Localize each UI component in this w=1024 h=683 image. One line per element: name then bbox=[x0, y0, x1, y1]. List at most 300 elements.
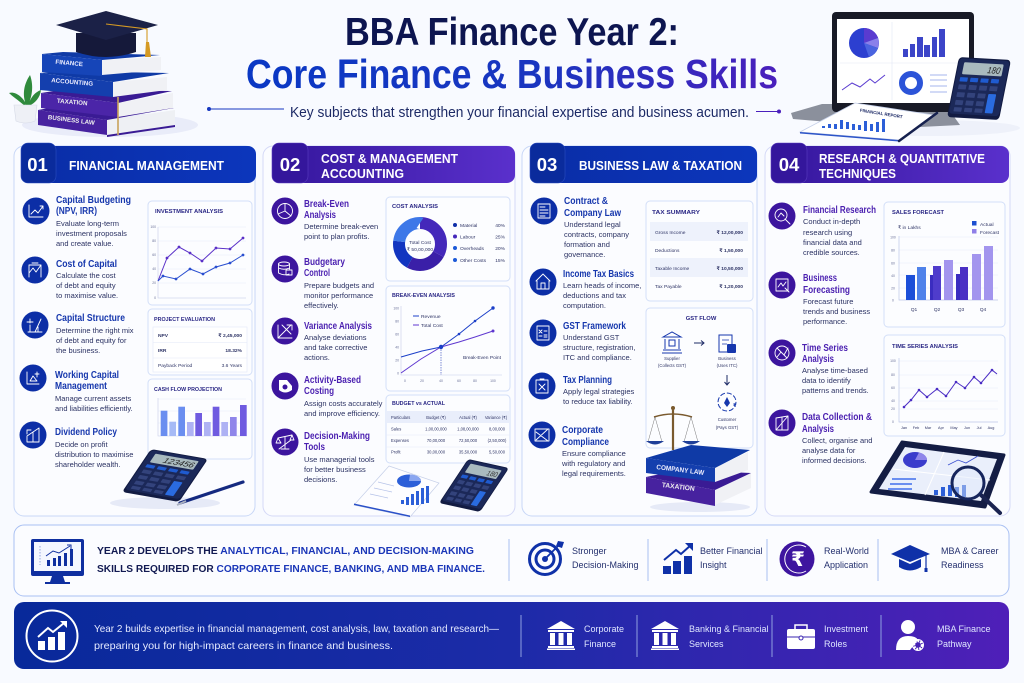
card: Budget vs Actual table: 1,08,00,000 bbox=[457, 426, 480, 432]
card: Tax Summary table: ₹ 10,50,000 bbox=[716, 266, 743, 272]
section header bbox=[530, 143, 757, 183]
card: GST Flow diagram: (Collects GST) bbox=[658, 363, 687, 368]
item: Contract & Company Law: contracts, company bbox=[564, 230, 629, 239]
section header: RESEARCH & QUANTITATIVE bbox=[819, 152, 985, 166]
career: Investment Roles: Roles bbox=[824, 639, 848, 649]
item: Budgetary Control: Control bbox=[304, 268, 330, 279]
item: GST Framework: structure, registration, bbox=[563, 343, 636, 352]
item: Cost of Capital bbox=[22, 256, 118, 300]
card: Budget vs Actual table: 1,00,00,000 bbox=[425, 426, 448, 432]
item: Time Series Analysis: Analyse time-based bbox=[802, 366, 868, 375]
icon: magnifier bbox=[952, 467, 1000, 513]
card: Break-Even Analysis line chart: 100 bbox=[393, 306, 399, 310]
item: Budgetary Control: Prepare budgets and bbox=[304, 281, 374, 290]
item: Dividend Policy: Dividend Policy bbox=[55, 427, 117, 438]
icon: growth chart in circle bbox=[26, 610, 78, 662]
card: Cost Analysis donut chart: 15% bbox=[495, 258, 506, 264]
item: GST Framework: GST Framework bbox=[563, 321, 626, 332]
item: Contract & Company Law: Understand legal bbox=[564, 220, 621, 229]
card: Sales Forecast bar chart: 40 bbox=[891, 274, 895, 278]
card: Break-Even Analysis line chart: 0 bbox=[397, 372, 399, 376]
item: Tax Planning: to reduce tax liability. bbox=[563, 397, 632, 406]
card: Break-Even Analysis line chart: 20 bbox=[420, 379, 424, 383]
card: Cost Analysis donut chart: Overheads bbox=[460, 246, 484, 252]
title: Core Finance & Business Skills bbox=[246, 51, 778, 97]
card: Break-Even Analysis line chart: 60 bbox=[395, 332, 399, 336]
card: Cost Analysis donut chart: Other Costs bbox=[460, 258, 487, 264]
item: Variance Analysis: and take corrective bbox=[304, 343, 367, 352]
icon: calculator and pen bbox=[110, 449, 243, 509]
item: Capital Budgeting: (NPV, IRR) bbox=[56, 206, 97, 217]
item: Data Collection & Analysis: Collect, organise and bbox=[802, 436, 872, 445]
item: Decision-Making Tools: for better business bbox=[304, 465, 366, 474]
item: Business Forecasting: trends and business bbox=[803, 307, 870, 316]
card: Cost Analysis donut chart: 20% bbox=[495, 246, 506, 252]
card: Budget vs Actual table bbox=[386, 395, 510, 463]
item: Activity-Based Costing: Assign costs accurately bbox=[304, 399, 383, 408]
item: Tax Planning: Tax Planning bbox=[563, 375, 612, 386]
item: Corporate Compliance bbox=[528, 422, 626, 478]
card: Break-Even Analysis line chart: Break-Even Point bbox=[463, 355, 502, 361]
card: GST Flow diagram: Supplier bbox=[664, 356, 680, 361]
career: Investment Roles: Investment bbox=[824, 624, 869, 634]
card: Project Evaluation table: PROJECT EVALUATION bbox=[154, 317, 215, 323]
item: Cost of Capital: Cost of Capital bbox=[56, 259, 117, 270]
item: Activity-Based Costing bbox=[272, 372, 383, 418]
section header: COST & MANAGEMENT bbox=[321, 152, 458, 166]
item: Corporate Compliance: Ensure compliance bbox=[562, 449, 626, 458]
benefit: Stronger Decision-Making: Decision-Making bbox=[572, 560, 639, 570]
card: Sales Forecast bar chart: Actual bbox=[980, 222, 994, 228]
item: Variance Analysis bbox=[272, 318, 372, 362]
item: Financial Research: credible sources. bbox=[803, 248, 860, 257]
illustration: law books: COMPANY LAW bbox=[656, 464, 705, 477]
item: Working Capital Management: and liabilities efficiently. bbox=[55, 404, 133, 413]
card: Sales Forecast bar chart: 60 bbox=[891, 262, 895, 266]
icon: pen bbox=[899, 113, 937, 141]
item: Income Tax Basics: computation. bbox=[563, 301, 606, 310]
card: Investment Analysis line chart: 0 bbox=[154, 296, 156, 300]
benefit: Better Financial Insight bbox=[663, 543, 763, 574]
card: Tax Summary table: Gross Income bbox=[655, 230, 686, 236]
card: Cost Analysis donut chart: COST ANALYSIS bbox=[392, 204, 438, 210]
panel: 02 Cost & Management Accounting bbox=[263, 143, 515, 517]
benefit: Better Financial Insight: Better Financial bbox=[700, 546, 763, 556]
card: Time Series Analysis line chart: 40 bbox=[891, 399, 895, 403]
item: Time Series Analysis bbox=[768, 340, 869, 395]
item: Capital Structure: Determine the right mix bbox=[56, 326, 134, 335]
section header: 04 bbox=[779, 154, 800, 175]
item: Business Forecasting bbox=[768, 272, 870, 326]
icon: supplier bank bbox=[662, 332, 682, 353]
card: Cost Analysis donut chart: Material bbox=[460, 223, 477, 229]
card: Budget vs Actual table: 70,00,000 bbox=[427, 438, 446, 443]
item: Income Tax Basics: Income Tax Basics bbox=[563, 269, 634, 280]
item: Business Forecasting: Forecasting bbox=[803, 285, 850, 296]
card: Break-Even Analysis line chart: 0 bbox=[404, 379, 406, 383]
item: Working Capital Management bbox=[20, 364, 133, 413]
icon: report with chart bbox=[354, 466, 439, 517]
book: Taxation bbox=[41, 90, 173, 117]
item: Decision-Making Tools: decisions. bbox=[304, 475, 337, 484]
item: Tax Planning: Apply legal strategies bbox=[563, 387, 635, 396]
card: Cost Analysis donut chart: 25% bbox=[495, 234, 506, 240]
card: Time Series Analysis line chart: Feb bbox=[913, 426, 919, 430]
icon: bookmark ribbon bbox=[117, 97, 119, 135]
card: Project Evaluation table: IRR bbox=[158, 348, 167, 354]
book: Business Law: BUSINESS LAW bbox=[47, 114, 95, 127]
benefit: MBA & Career Readiness: Readiness bbox=[941, 560, 984, 570]
card: Sales Forecast bar chart: Q2 bbox=[934, 307, 941, 313]
section header bbox=[771, 143, 1009, 183]
item: Activity-Based Costing: Activity-Based bbox=[304, 375, 361, 386]
book: Business Law bbox=[38, 106, 175, 137]
item: Tax Planning bbox=[528, 372, 635, 406]
card: Break-Even Analysis line chart: BREAK-EVEN ANALYSIS bbox=[392, 293, 455, 299]
icon: report sheet: FINANCIAL REPORT bbox=[860, 108, 903, 119]
item: Activity-Based Costing: and improve efficiency. bbox=[304, 409, 380, 418]
card: Sales Forecast bar chart: 20 bbox=[891, 286, 895, 290]
item: Time Series Analysis: data to identify bbox=[802, 376, 851, 385]
item: Break-Even Analysis: point to plan profits. bbox=[304, 232, 369, 241]
card: Investment Analysis line chart: 80 bbox=[152, 239, 156, 243]
card: Break-Even Analysis line chart: 40 bbox=[439, 379, 443, 383]
card: Tax Summary table: Deductions bbox=[655, 248, 680, 254]
book: Taxation: TAXATION bbox=[57, 98, 88, 107]
card: Budget vs Actual table: 8,00,000 bbox=[489, 426, 506, 432]
closing text: Year 2 builds expertise in financial management, cost analysis, law, taxation and research— bbox=[94, 623, 499, 635]
item: Contract & Company Law: Contract & bbox=[564, 196, 608, 207]
card: Time Series Analysis line chart bbox=[884, 335, 1005, 436]
item: Capital Structure bbox=[22, 312, 134, 355]
section header: 03 bbox=[537, 154, 557, 175]
item: Capital Budgeting: Evaluate long-term bbox=[56, 219, 119, 228]
card: Cost Analysis donut chart bbox=[386, 197, 510, 281]
card: Budget vs Actual table: Budget (₹) bbox=[426, 415, 446, 420]
card: Time Series Analysis line chart: Apr bbox=[938, 426, 945, 430]
card: Break-Even Analysis line chart bbox=[386, 286, 510, 391]
item: Budgetary Control: Budgetary bbox=[304, 257, 345, 268]
card: Break-Even Analysis line chart: Revenue bbox=[421, 314, 441, 320]
section header: TECHNIQUES bbox=[819, 167, 896, 181]
icon: calculator: 180 bbox=[986, 65, 1002, 76]
card: Sales Forecast bar chart: ₹ in Lakhs bbox=[898, 225, 921, 231]
illustration: law books bbox=[646, 445, 751, 512]
item: Dividend Policy: Decide on profit bbox=[55, 440, 108, 449]
illustration: tablet with magnifier bbox=[871, 442, 1004, 513]
career: Investment Roles bbox=[787, 624, 869, 649]
book: Accounting bbox=[40, 71, 169, 97]
card: Cash Flow Projection bar chart: CASH FLOW PROJECTION bbox=[154, 387, 222, 393]
career: Banking & Financial Services: Services bbox=[689, 639, 724, 649]
card: Tax Summary table: Tax Payable bbox=[655, 284, 682, 290]
item: Financial Research: Conduct in-depth bbox=[803, 217, 860, 226]
card: Break-Even Analysis line chart: 80 bbox=[395, 320, 399, 324]
card: Time Series Analysis line chart: 20 bbox=[891, 407, 895, 411]
card: Sales Forecast bar chart: Forecast bbox=[980, 230, 1000, 236]
card: Sales Forecast bar chart: 0 bbox=[892, 298, 894, 302]
item: Data Collection & Analysis: informed decisions. bbox=[802, 456, 867, 465]
illustration: scales of justice bbox=[646, 406, 700, 457]
illustration: laptop, calculator and report bbox=[791, 12, 1020, 142]
icon: monitor with chart bbox=[31, 539, 84, 584]
section header: 01 bbox=[27, 154, 48, 175]
card: Break-Even Analysis line chart: 100 bbox=[490, 379, 496, 383]
card: Tax Summary table: ₹ 12,00,000 bbox=[716, 230, 743, 236]
item: Cost of Capital: to maximise value. bbox=[56, 291, 118, 300]
card: Budget vs Actual table: Particulars bbox=[391, 415, 410, 420]
item: Capital Budgeting: and create value. bbox=[56, 239, 114, 248]
benefit: Real-World Application bbox=[780, 542, 869, 576]
card: Sales Forecast bar chart bbox=[884, 202, 1005, 327]
item: Income Tax Basics: Learn heads of income, bbox=[563, 281, 641, 290]
item: Decision-Making Tools: Decision-Making bbox=[304, 431, 370, 442]
icon: calculator and pen: 123456 bbox=[161, 456, 197, 469]
item: Financial Research bbox=[768, 202, 876, 257]
card: Sales Forecast bar chart: Q3 bbox=[958, 307, 965, 313]
title bbox=[246, 11, 778, 97]
card: Investment Analysis line chart bbox=[148, 201, 252, 305]
icon: calculator bbox=[947, 57, 1011, 120]
card: Tax Summary table bbox=[646, 201, 753, 301]
card: Budget vs Actual table: 72,50,000 bbox=[459, 438, 478, 443]
card: Investment Analysis line chart: 20 bbox=[152, 281, 156, 285]
item: Corporate Compliance: legal requirements. bbox=[562, 469, 626, 478]
card: Time Series Analysis line chart: May bbox=[950, 426, 958, 430]
card: Break-Even Analysis line chart: 40 bbox=[395, 346, 399, 350]
item: Dividend Policy: distribution to maximise bbox=[55, 450, 133, 459]
card: Time Series Analysis line chart: 100 bbox=[890, 359, 896, 363]
item: Data Collection & Analysis bbox=[768, 410, 872, 465]
section header: BUSINESS LAW & TAXATION bbox=[579, 159, 742, 173]
card: Investment Analysis line chart: INVESTMENT ANALYSIS bbox=[155, 209, 223, 215]
card: Tax Summary table: TAX SUMMARY bbox=[652, 210, 700, 216]
item: Budgetary Control: monitor performance bbox=[304, 291, 373, 300]
book: Accounting: ACCOUNTING bbox=[51, 77, 94, 88]
card: Cost Analysis donut chart: Total Cost bbox=[409, 240, 432, 246]
card: Project Evaluation table: 3.6 Years bbox=[222, 363, 243, 369]
panel: 01 Financial Management bbox=[14, 143, 256, 516]
item: Income Tax Basics bbox=[530, 268, 641, 310]
item: Financial Research: research using bbox=[803, 228, 852, 237]
card: Investment Analysis line chart: 60 bbox=[152, 253, 156, 257]
item: Contract & Company Law: formation and bbox=[564, 240, 610, 249]
card: Time Series Analysis line chart: TIME SERIES ANALYSIS bbox=[892, 344, 958, 350]
item: Financial Research: financial data and bbox=[803, 238, 862, 247]
item: Break-Even Analysis: Analysis bbox=[304, 210, 336, 221]
card: GST Flow diagram: Business bbox=[718, 356, 736, 361]
card: Time Series Analysis line chart: 80 bbox=[891, 373, 895, 377]
card: Cost Analysis donut chart: 40% bbox=[495, 223, 506, 229]
item: Data Collection & Analysis: Analysis bbox=[802, 424, 834, 435]
card: Project Evaluation table: Payback Period bbox=[158, 363, 193, 369]
item: Time Series Analysis: Time Series bbox=[802, 343, 848, 354]
career: Corporate Finance: Corporate bbox=[584, 624, 624, 634]
card: Tax Summary table: Taxable Income bbox=[655, 266, 690, 272]
card: Sales Forecast bar chart: 80 bbox=[891, 248, 895, 252]
card: Budget vs Actual table: 30,00,000 bbox=[427, 450, 446, 454]
item: Decision-Making Tools bbox=[272, 428, 375, 484]
icon: potted plant bbox=[9, 75, 41, 123]
item: Variance Analysis: Analyse deviations bbox=[304, 333, 367, 342]
card: Sales Forecast bar chart: SALES FORECAST bbox=[892, 210, 944, 216]
item: Business Forecasting: Forecast future bbox=[803, 297, 853, 306]
benefit: Stronger Decision-Making bbox=[530, 541, 639, 574]
card: Budget vs Actual table: Profit bbox=[391, 450, 401, 454]
item: Dividend Policy bbox=[20, 422, 133, 469]
item: Capital Structure: the business. bbox=[56, 346, 100, 355]
card: GST Flow diagram: (Pays GST) bbox=[716, 425, 739, 430]
card: Tax Summary table: ₹ 1,20,000 bbox=[719, 284, 743, 290]
icon: report sheet bbox=[800, 103, 934, 142]
career: MBA Finance Pathway bbox=[896, 620, 991, 650]
card: Time Series Analysis line chart: Mar bbox=[925, 426, 932, 430]
item: Variance Analysis: actions. bbox=[304, 353, 330, 362]
card: Time Series Analysis line chart: Jan bbox=[901, 426, 907, 430]
card: Project Evaluation table: NPV bbox=[158, 333, 169, 339]
card: Budget vs Actual table: (2,50,000) bbox=[488, 438, 507, 443]
item: GST Framework bbox=[530, 320, 636, 362]
card: Investment Analysis line chart: 40 bbox=[152, 267, 156, 271]
closing text: preparing you for high-impact careers in finance and business. bbox=[94, 640, 393, 652]
item: Capital Structure: of debt and equity for bbox=[56, 336, 127, 345]
card: Sales Forecast bar chart: Q4 bbox=[980, 307, 987, 313]
item: GST Framework: ITC and compliance. bbox=[563, 353, 632, 362]
item: Working Capital Management: Working Capital bbox=[55, 370, 119, 381]
item: Cost of Capital: of debt and equity bbox=[56, 281, 116, 290]
benefit: Stronger Decision-Making: Stronger bbox=[572, 546, 607, 556]
panel: 03 Business Law & Taxation bbox=[522, 143, 757, 516]
benefit: Better Financial Insight: Insight bbox=[700, 560, 727, 570]
item: Time Series Analysis: patterns and trends. bbox=[802, 386, 869, 395]
summary text bbox=[97, 545, 485, 575]
item: Variance Analysis: Variance Analysis bbox=[304, 321, 372, 332]
career: Corporate Finance: Finance bbox=[584, 639, 616, 649]
benefit: Real-World Application: Real-World bbox=[824, 546, 869, 556]
card: Budget vs Actual table: Expenses bbox=[391, 438, 409, 443]
card: Budget vs Actual table: BUDGET vs ACTUAL bbox=[392, 401, 445, 407]
card: Sales Forecast bar chart: 100 bbox=[890, 236, 896, 240]
card: GST Flow diagram: GST FLOW bbox=[686, 316, 717, 322]
icon: customer: ₹ bbox=[733, 403, 737, 409]
item: Business Forecasting: performance. bbox=[803, 317, 847, 326]
card: Break-Even Analysis line chart: 60 bbox=[457, 379, 461, 383]
item: Contract & Company Law bbox=[530, 196, 629, 259]
card: GST Flow diagram bbox=[646, 308, 753, 448]
item: Break-Even Analysis bbox=[272, 198, 378, 241]
item: Decision-Making Tools: Use managerial tools bbox=[304, 455, 375, 464]
card: Project Evaluation table: ₹ 2,45,000 bbox=[218, 333, 242, 339]
section header: FINANCIAL MANAGEMENT bbox=[69, 159, 224, 173]
title: BBA Finance Year 2: bbox=[345, 11, 679, 54]
card: Time Series Analysis line chart: Aug bbox=[988, 426, 994, 430]
item: Budgetary Control: effectively. bbox=[304, 301, 339, 310]
section header: 02 bbox=[280, 154, 300, 175]
item: Capital Budgeting: Capital Budgeting bbox=[56, 195, 131, 206]
card: Break-Even Analysis line chart: 80 bbox=[473, 379, 477, 383]
item: Capital Budgeting: investment proposals bbox=[56, 229, 127, 238]
book: Finance bbox=[42, 52, 161, 76]
item: Capital Structure: Capital Structure bbox=[56, 313, 125, 324]
summary text: YEAR 2 DEVELOPS THE ANALYTICAL, FINANCIAL, AND DECISION-MAKING bbox=[97, 545, 474, 557]
card: Budget vs Actual table: Variance (₹) bbox=[485, 415, 508, 420]
item: Data Collection & Analysis: analyse data for bbox=[802, 446, 856, 455]
subtitle: Key subjects that strengthen your financial expertise and business acumen. bbox=[290, 104, 749, 121]
item: Break-Even Analysis: Break-Even bbox=[304, 199, 349, 210]
illustration: law books: TAXATION bbox=[661, 482, 695, 493]
item: Working Capital Management: Management bbox=[55, 381, 108, 392]
career: Banking & Financial Services: Banking & Financial bbox=[689, 624, 769, 634]
career: Banking & Financial Services bbox=[651, 621, 769, 650]
item: Decision-Making Tools: Tools bbox=[304, 442, 325, 453]
card: Cost Analysis donut chart: Labour bbox=[460, 234, 476, 240]
section header bbox=[21, 143, 256, 183]
item: Data Collection & Analysis: Data Collection & bbox=[802, 412, 872, 423]
item: Contract & Company Law: Company Law bbox=[564, 208, 621, 219]
benefit: Real-World Application: ₹ bbox=[791, 549, 805, 571]
card: Budget vs Actual table: 5,50,000 bbox=[489, 450, 506, 454]
item: Corporate Compliance: Corporate bbox=[562, 425, 603, 436]
item: Financial Research: Financial Research bbox=[803, 205, 876, 216]
benefit: Real-World Application: Application bbox=[824, 560, 868, 570]
card: Budget vs Actual table: Actual (₹) bbox=[459, 415, 478, 420]
card: Project Evaluation table: 18.32% bbox=[225, 348, 243, 354]
item: Working Capital Management: Manage current assets bbox=[55, 394, 132, 403]
item: Contract & Company Law: governance. bbox=[564, 250, 605, 259]
card: GST Flow diagram: (Uses ITC) bbox=[717, 363, 738, 368]
icon: graduation cap bbox=[56, 11, 158, 57]
icon: business document bbox=[719, 335, 736, 353]
career: MBA Finance Pathway: Pathway bbox=[937, 639, 972, 649]
band: career pathways bbox=[14, 602, 1009, 669]
band: Year 2 key skills summary bbox=[14, 525, 1009, 596]
item: Dividend Policy: shareholder wealth. bbox=[55, 460, 120, 469]
item: Corporate Compliance: Compliance bbox=[562, 437, 609, 448]
card: Tax Summary table: ₹ 1,50,000 bbox=[719, 248, 743, 254]
item: GST Framework: Understand GST bbox=[563, 333, 620, 342]
card: Time Series Analysis line chart: Jun bbox=[964, 426, 970, 430]
card: Budget vs Actual table: 35,50,000 bbox=[459, 450, 478, 454]
career: Corporate Finance bbox=[547, 621, 624, 650]
card: Time Series Analysis line chart: 60 bbox=[891, 386, 895, 390]
card: Break-Even Analysis line chart: 20 bbox=[395, 358, 399, 362]
icon: calculator: 180 bbox=[484, 469, 500, 479]
benefit: MBA & Career Readiness bbox=[891, 545, 999, 572]
card: Cost Analysis donut chart: ₹ 50,00,000 bbox=[407, 247, 433, 253]
card: GST Flow diagram: Customer bbox=[718, 417, 737, 422]
career: MBA Finance Pathway: MBA Finance bbox=[937, 624, 991, 634]
arrow: supplier to business bbox=[694, 340, 704, 346]
item: Income Tax Basics: deductions and tax bbox=[563, 291, 626, 300]
card: Cash Flow Projection bar chart bbox=[148, 379, 252, 459]
icon: calculator bbox=[439, 459, 509, 512]
closing text bbox=[94, 623, 499, 652]
section header: ACCOUNTING bbox=[321, 167, 404, 181]
card: Break-Even Analysis line chart: Total Cost bbox=[421, 323, 443, 329]
card: Time Series Analysis line chart: 0 bbox=[892, 420, 894, 424]
item: Budgetary Control bbox=[272, 256, 374, 310]
arrow: business to customer bbox=[724, 375, 730, 385]
card: Sales Forecast bar chart: Q1 bbox=[911, 307, 918, 313]
section header bbox=[272, 143, 515, 183]
item: Business Forecasting: Business bbox=[803, 273, 837, 284]
item: Time Series Analysis: Analysis bbox=[802, 354, 834, 365]
card: Time Series Analysis line chart: Jul bbox=[977, 426, 982, 430]
benefit: MBA & Career Readiness: MBA & Career bbox=[941, 546, 999, 556]
card: Project Evaluation table bbox=[148, 309, 252, 375]
summary text: SKILLS REQUIRED FOR CORPORATE FINANCE, BANKING, AND MBA FINANCE. bbox=[97, 563, 485, 575]
book: Finance: FINANCE bbox=[55, 59, 83, 68]
